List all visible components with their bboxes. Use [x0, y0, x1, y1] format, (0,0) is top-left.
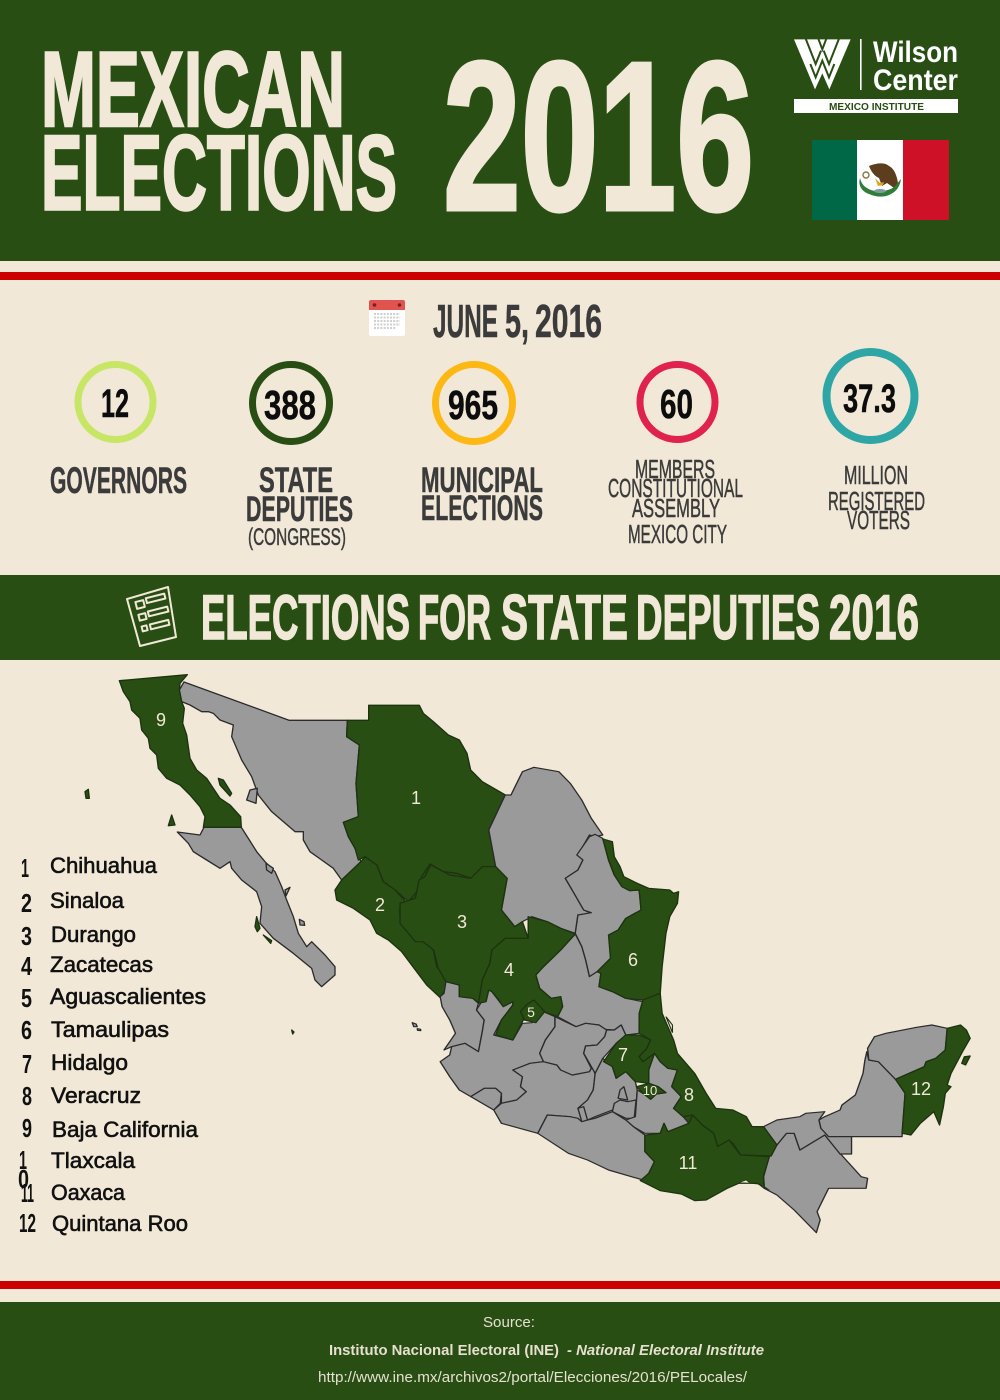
- state legend: Quintana Roo: [52, 1211, 188, 1236]
- stat: 388 state deputies: 388: [264, 382, 316, 428]
- stat: 37.3 million registered voters: REGISTERED: [828, 486, 925, 516]
- icon: calendar: [369, 300, 405, 336]
- state legend: 7: [22, 1049, 32, 1079]
- stat: 388 state deputies: DEPUTIES: [246, 490, 353, 529]
- map numbers: 4: [504, 960, 514, 980]
- map numbers: 10: [643, 1083, 657, 1098]
- flag of Mexico: [812, 140, 949, 220]
- state legend: 5: [21, 983, 32, 1013]
- state legend: [18, 853, 206, 1238]
- red rule bottom: [0, 1281, 1000, 1289]
- stat: 965 municipal elections: MUNICIPAL: [421, 461, 543, 500]
- stat: 37.3 million registered voters: VOTERS: [847, 505, 910, 535]
- state legend: Chihuahua: [50, 853, 158, 878]
- stat: 12 governors: GOVERNORS: [50, 460, 187, 501]
- state legend: 12: [19, 1208, 36, 1238]
- state legend: Veracruz: [51, 1083, 141, 1108]
- date: JUNE: [433, 295, 498, 347]
- stat: 965 municipal elections: 965: [448, 382, 498, 428]
- state legend: Durango: [51, 922, 136, 947]
- stat: 60 members constitutional assembly: [608, 364, 743, 549]
- logo: Wilson Center Mexico Institute: Center: [873, 64, 958, 97]
- icon: ballot sheet: [127, 587, 176, 646]
- stat: 12 governors: [50, 364, 187, 501]
- stat: 388 state deputies: (CONGRESS): [248, 524, 346, 551]
- stat: 965 municipal elections: [421, 364, 543, 528]
- map numbers: 3: [457, 912, 467, 932]
- state legend: Tlaxcala: [51, 1148, 136, 1173]
- stat: 388 state deputies: [246, 364, 353, 551]
- state legend: 9: [22, 1113, 32, 1143]
- stat: 965 municipal elections: ELECTIONS: [421, 489, 543, 528]
- footer: source: - National Electoral Institute: [567, 1343, 764, 1359]
- banner heading: [201, 583, 919, 653]
- logo: Wilson Center Mexico Institute: MEXICO INSTITUTE: [829, 101, 924, 113]
- footer: source: [0, 1302, 1000, 1400]
- map numbers: 9: [156, 710, 166, 730]
- stat: 60 members constitutional assembly: MEXICO CITY: [628, 519, 727, 549]
- stat: 60 members constitutional assembly: CONSTITUTIONAL: [608, 473, 743, 503]
- state legend: 2: [21, 888, 32, 918]
- map of Mexico: [85, 675, 970, 1233]
- banner heading: 2016: [829, 583, 919, 653]
- footer: source: Source:: [483, 1315, 535, 1331]
- map numbers: 8: [684, 1085, 694, 1105]
- title: [41, 29, 397, 232]
- map numbers: 2: [375, 895, 385, 915]
- state legend: 1: [21, 853, 29, 883]
- logo: Wilson Center Mexico Institute: Wilson: [873, 36, 958, 69]
- state legend: Aguascalientes: [50, 984, 206, 1009]
- state legend: Sinaloa: [50, 888, 125, 913]
- state legend: 0: [18, 1164, 29, 1194]
- state legend: 6: [21, 1015, 32, 1045]
- state legend: 1: [19, 1145, 27, 1175]
- map numbers: 6: [628, 950, 638, 970]
- stat: 37.3 million registered voters: MILLION: [844, 460, 908, 490]
- state legend: Hidalgo: [51, 1050, 128, 1075]
- map numbers: [156, 710, 931, 1173]
- state legend: Tamaulipas: [51, 1017, 169, 1042]
- stat: 60 members constitutional assembly: MEMBERS: [635, 454, 715, 484]
- state legend: 8: [22, 1081, 32, 1111]
- year: 2016: [443, 18, 754, 254]
- stat: 388 state deputies: STATE: [259, 461, 333, 500]
- map numbers: 5: [527, 1004, 535, 1020]
- map numbers: 12: [911, 1079, 931, 1099]
- date: 5,: [505, 295, 529, 347]
- map numbers: 1: [411, 788, 421, 808]
- date: 2016: [535, 295, 602, 347]
- state legend: Baja California: [52, 1117, 199, 1142]
- stat: 37.3 million registered voters: 37.3: [843, 377, 896, 421]
- banner heading: FOR: [418, 583, 491, 653]
- section banner: [0, 575, 1000, 660]
- map numbers: 11: [679, 1153, 697, 1173]
- state legend: 3: [21, 921, 32, 951]
- stat: 60 members constitutional assembly: 60: [660, 381, 693, 427]
- stat: 12 governors: 12: [101, 382, 129, 426]
- map numbers: 7: [618, 1045, 628, 1065]
- footer: source: http://www.ine.mx/archivos2/portal/Elecciones/2016/PELocales/: [318, 1370, 748, 1386]
- banner heading: STATE: [501, 583, 628, 653]
- title: MEXICAN: [41, 29, 345, 149]
- red rule top: [0, 272, 1000, 280]
- banner heading: DEPUTIES: [636, 583, 820, 653]
- footer: source: Instituto Nacional Electoral (INE): [329, 1343, 559, 1359]
- banner heading: ELECTIONS: [201, 583, 410, 653]
- header band: [0, 0, 1000, 261]
- state legend: Zacatecas: [50, 952, 153, 977]
- stat: 37.3 million registered voters: [826, 352, 925, 535]
- state legend: 4: [21, 951, 32, 981]
- logo: Wilson Center Mexico Institute: [794, 36, 958, 113]
- state legend: 11: [21, 1178, 34, 1208]
- title: ELECTIONS: [41, 112, 397, 232]
- state legend: Oaxaca: [51, 1180, 126, 1205]
- date row: [369, 295, 602, 347]
- stat: 60 members constitutional assembly: ASSEMBLY: [632, 493, 720, 523]
